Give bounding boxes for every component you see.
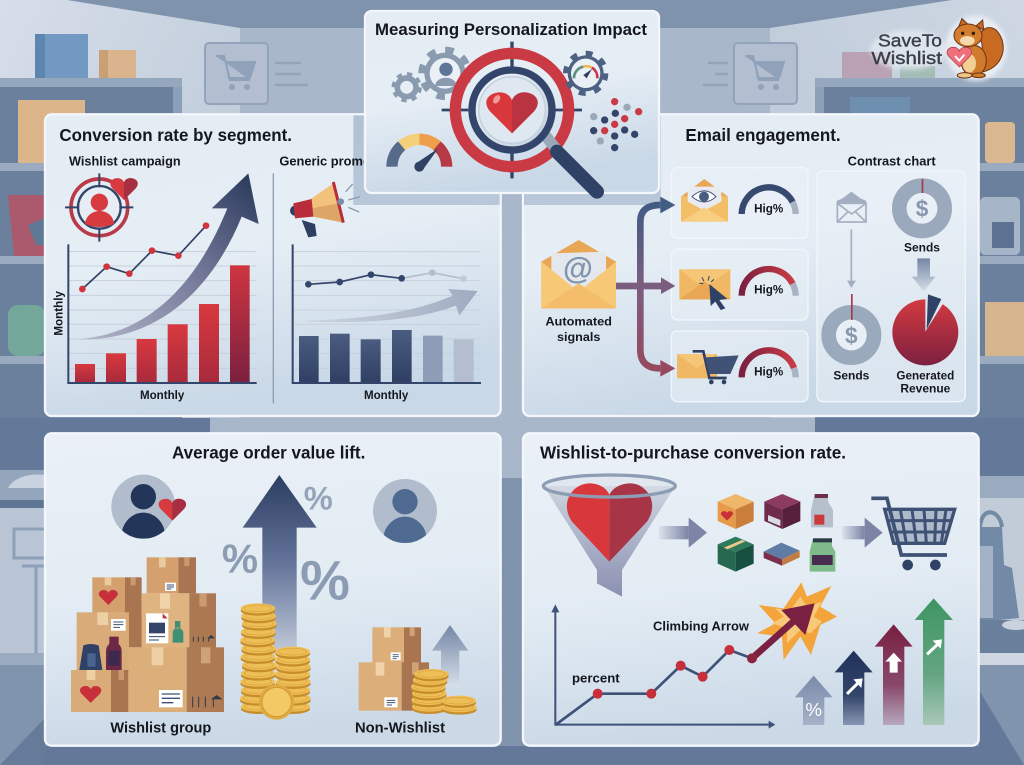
boxes: wishlist group stack xyxy=(71,557,224,712)
arrow: to generated revenue xyxy=(912,258,935,292)
arrow: large lift xyxy=(243,475,317,653)
arrows: signals branching to cards xyxy=(616,197,675,377)
label: signals: signals xyxy=(557,330,600,344)
arrow: sends downward thin xyxy=(847,229,856,288)
percent symbols xyxy=(222,479,350,611)
gauge: cart rate xyxy=(742,350,796,378)
card: email clicked xyxy=(671,249,808,320)
icon: megaphone xyxy=(290,182,360,237)
card: email opened xyxy=(671,168,808,238)
icon: shopping cart xyxy=(871,498,955,570)
icons: wishlist products xyxy=(718,494,835,572)
icon: non-wishlist customer xyxy=(373,479,437,543)
label: automated signals: Automated xyxy=(545,315,612,329)
arrow: rising wishlist trend xyxy=(78,173,259,339)
axis label: monthly left: Monthly xyxy=(140,388,185,402)
coins: short stacks xyxy=(411,669,477,715)
arrows: stepped growth bars: % xyxy=(805,699,822,720)
donut: sends top xyxy=(899,179,945,231)
donut: sends bottom: $ xyxy=(845,322,858,348)
gauge: click rate xyxy=(742,269,796,297)
logo text: save to: SaveTo xyxy=(878,31,942,51)
icon: magnifier on target with heart xyxy=(442,42,597,192)
icon: targeted customer with heart xyxy=(65,173,138,242)
panel: conversion rate by segment xyxy=(45,114,501,416)
logo text: wishlist: Wishlist xyxy=(871,48,942,68)
arrow: small lift xyxy=(432,625,468,687)
icon: automated signals envelope: @ xyxy=(563,251,593,285)
gauge: cart rate: Hig% xyxy=(754,365,784,378)
coins: tall stacks xyxy=(240,603,311,720)
heading: average order value lift: Average order value lift. xyxy=(172,442,365,462)
gauge: click rate: Hig% xyxy=(754,284,784,297)
arrow: generic modest trend xyxy=(305,289,478,322)
label: generated: Generated xyxy=(896,369,954,383)
panel: wishlist-to-purchase conversion rate xyxy=(523,433,979,746)
heading: email engagement: Email engagement. xyxy=(685,125,841,145)
heading: wishlist to purchase: Wishlist-to-purchase conversion rate. xyxy=(540,442,846,462)
label: generic promotion: Generic promotion xyxy=(279,155,394,169)
pie: generated revenue xyxy=(892,294,958,365)
arrows: stepped growth bars xyxy=(795,598,953,725)
heading: main title: Measuring Personalization Impact xyxy=(375,20,647,39)
heading: conversion rate: Conversion rate by segment. xyxy=(59,125,292,145)
panel: email engagement xyxy=(523,114,979,416)
gauge: open rate xyxy=(742,187,796,215)
label: wishlist group: Wishlist group xyxy=(110,720,211,737)
card: email to cart xyxy=(671,331,808,402)
icon: person gear xyxy=(422,51,468,96)
icon: envelope with cart xyxy=(677,351,739,384)
panel: measuring personalization impact xyxy=(365,11,659,193)
icon: small gear xyxy=(394,75,419,100)
label: climbing arrow: Climbing Arrow xyxy=(653,619,749,633)
chart: climbing conversion line xyxy=(551,582,837,729)
label: non-wishlist: Non-Wishlist xyxy=(355,720,445,737)
card: contrast chart xyxy=(817,171,965,402)
axis label: monthly vertical: Monthly xyxy=(52,290,65,336)
icon: data dots xyxy=(590,98,642,151)
arrow: products to cart xyxy=(842,518,883,548)
icon: wishlist customer xyxy=(111,474,186,539)
percent symbols: % xyxy=(300,548,350,611)
percent symbols: % xyxy=(222,536,258,582)
label: contrast chart: Contrast chart xyxy=(848,155,936,169)
arrow: funnel to products xyxy=(659,518,707,548)
donut: sends top: $ xyxy=(916,196,929,222)
icon: speed gauge xyxy=(392,139,447,170)
label: percent: percent xyxy=(572,672,620,686)
icon: envelope with eye xyxy=(681,179,728,222)
percent symbols: % xyxy=(304,479,333,516)
chart: wishlist campaign bars and line xyxy=(68,222,257,383)
icon: heart funnel xyxy=(543,475,675,597)
logo: SaveToWishlist squirrel xyxy=(870,16,1007,81)
icon: envelope with cursor xyxy=(679,269,730,310)
label: revenue: Revenue xyxy=(900,381,951,395)
chart: generic promotion bars and line xyxy=(293,244,481,383)
label: wishlist campaign: Wishlist campaign xyxy=(69,155,181,169)
panel: average order value lift xyxy=(45,433,501,746)
icon: squirrel mascot xyxy=(947,19,1003,78)
gauge: open rate: Hig% xyxy=(754,202,784,215)
label: sends bottom: Sends xyxy=(833,369,870,383)
axis label: monthly right: Monthly xyxy=(364,388,409,402)
icon: gauge gear xyxy=(566,54,605,93)
icon: sends envelope xyxy=(837,193,866,222)
donut: sends bottom xyxy=(829,294,874,358)
boxes: non-wishlist stack xyxy=(359,627,429,711)
label: sends top: Sends xyxy=(904,241,940,255)
icon: automated signals envelope xyxy=(541,240,616,308)
